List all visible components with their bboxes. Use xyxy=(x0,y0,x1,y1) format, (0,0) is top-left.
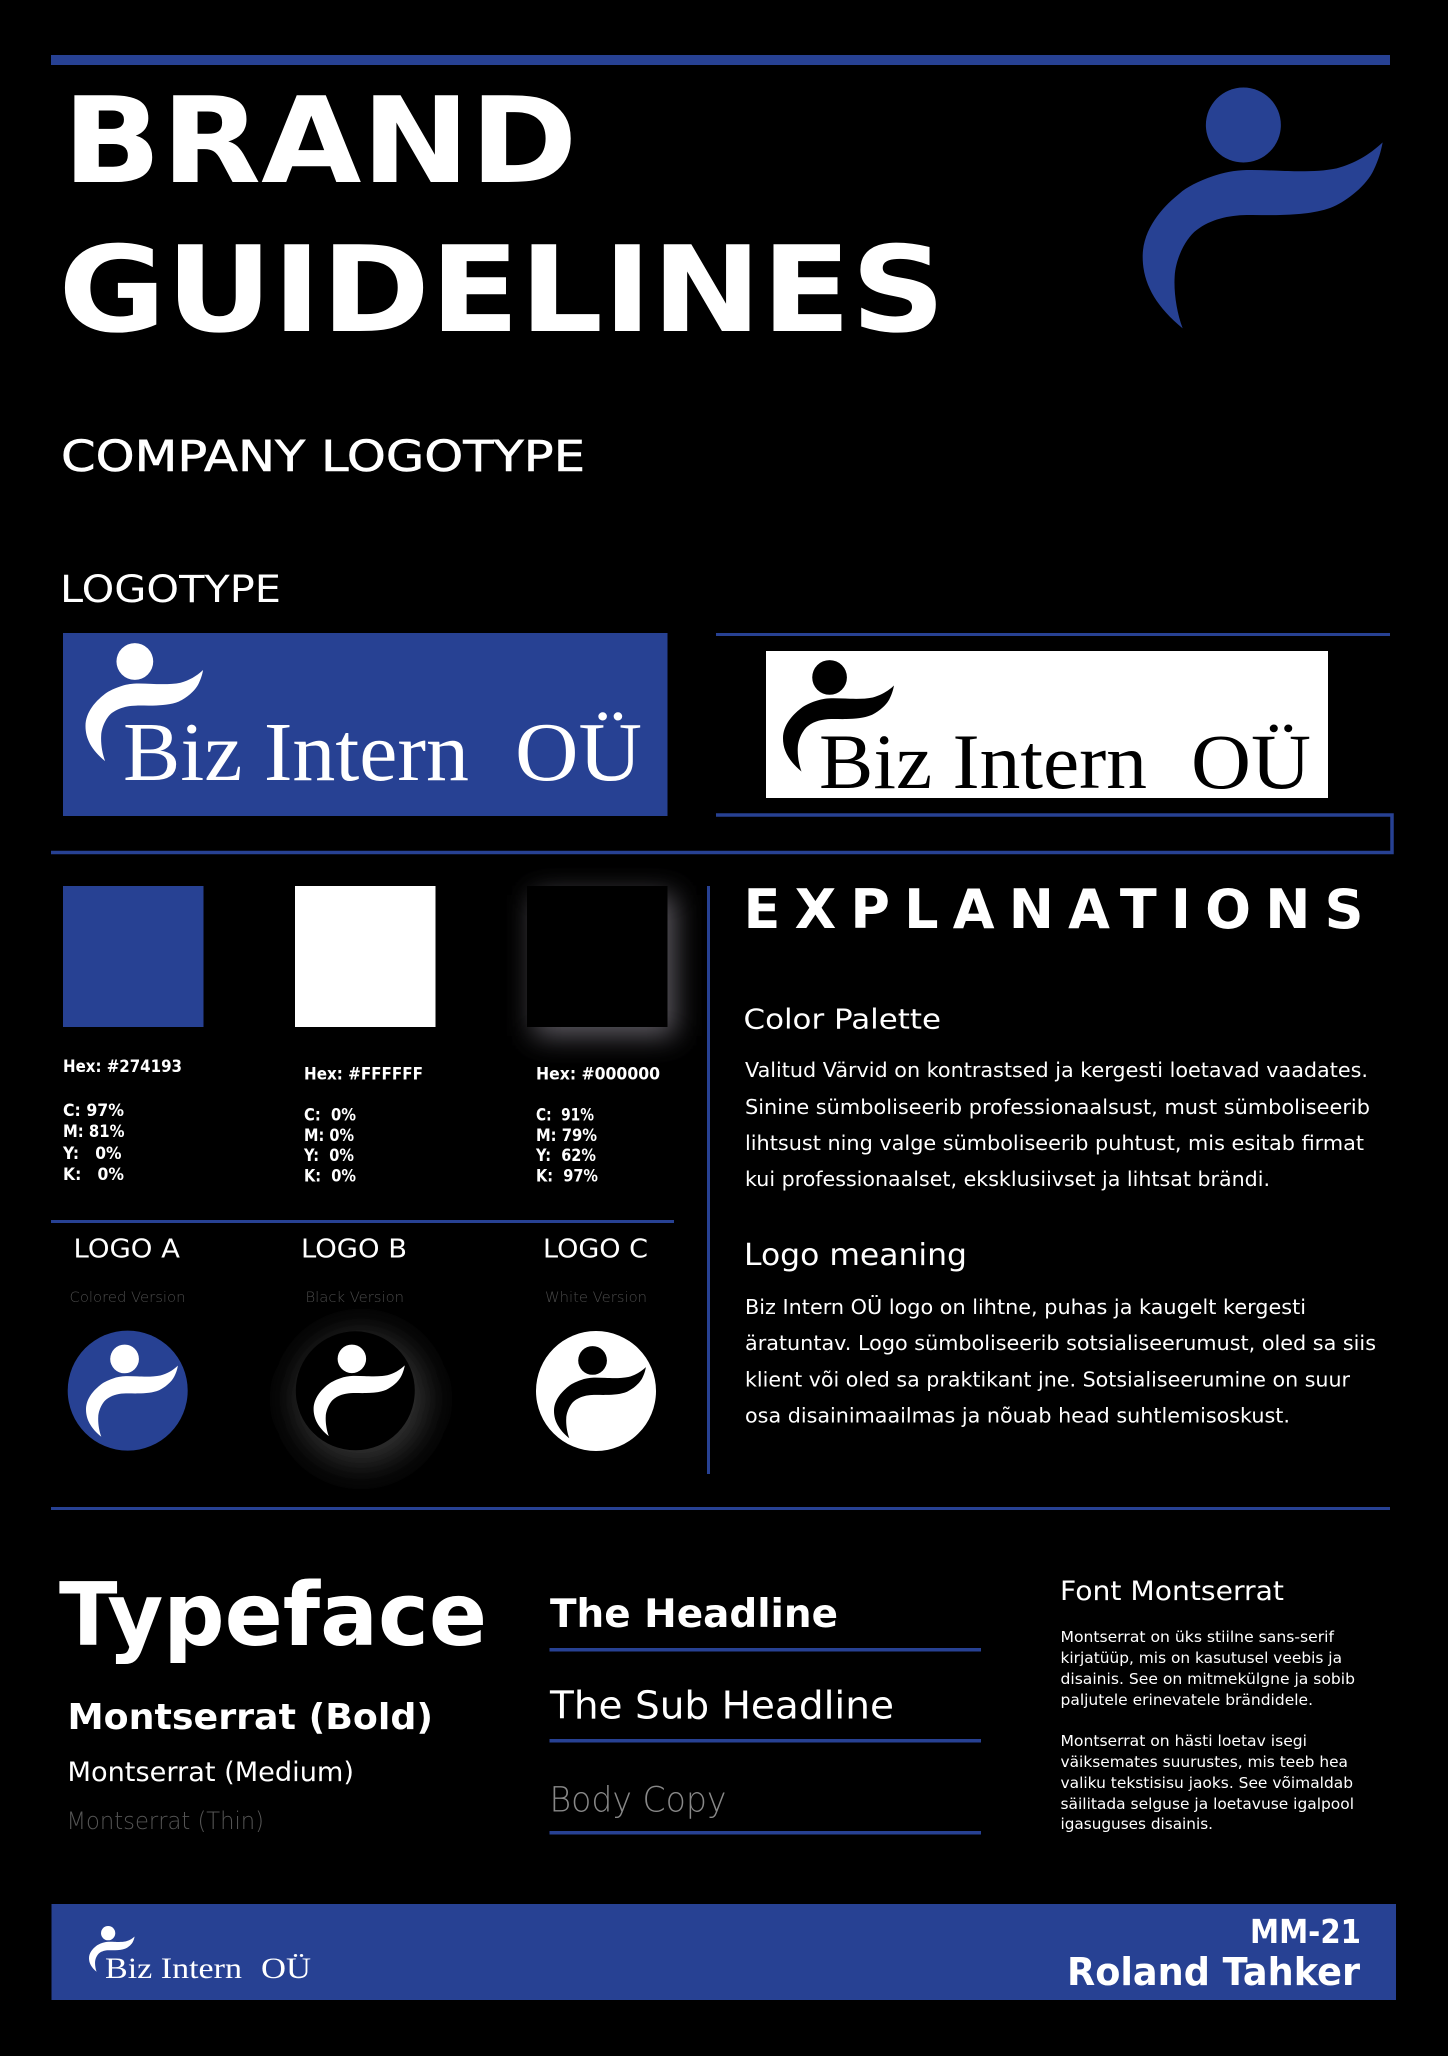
panel: white logotype xyxy=(716,633,1390,805)
panel: type hierarchy xyxy=(549,1592,981,1834)
color values: black: Hex: #000000 xyxy=(536,1065,660,1085)
panel: typeface: Montserrat (Thin) xyxy=(66,1807,264,1835)
text block: color palette: Valitud Värvid on kontrastsed ja kergesti loetavad vaadates. xyxy=(745,1058,1368,1082)
panel: typeface: Montserrat (Bold) xyxy=(68,1697,433,1738)
color values: blue: Hex: #274193 xyxy=(63,1057,182,1077)
text block: color palette: lihtsust ning valge sümboliseerib puhtust, mis esitab firmat xyxy=(745,1131,1364,1155)
color values: blue: Y: 0% xyxy=(62,1144,122,1164)
text block: font montserrat xyxy=(1060,1576,1355,1833)
text block: font montserrat: paljutele erinevatele brändidele. xyxy=(1060,1691,1313,1709)
text block: font montserrat: disainis. See on mitmekülgne ja sobib xyxy=(1060,1670,1355,1688)
icon: black mark xyxy=(783,660,894,771)
wordmark: Biz Intern xyxy=(819,718,1147,805)
text block: font montserrat: Montserrat on hästi loetav isegi xyxy=(1060,1732,1307,1750)
logo C xyxy=(536,1234,656,1451)
panel: color palette xyxy=(62,886,675,1187)
title: BRAND xyxy=(62,73,578,211)
panel: type hierarchy: Body Copy xyxy=(550,1780,726,1820)
logo B: Black Version xyxy=(306,1290,404,1306)
logo B xyxy=(295,1234,427,1465)
text block: font montserrat: säilitada selguse ja loetavuse igalpool xyxy=(1060,1795,1354,1813)
text block: color palette: Color Palette xyxy=(744,1003,941,1036)
color values: black: C: 91% xyxy=(536,1106,594,1126)
text block: font montserrat: kirjatüüp, mis on kasutusel veebis ja xyxy=(1060,1649,1342,1667)
color values: black: M: 79% xyxy=(536,1126,597,1146)
heading: company logotype: COMPANY LOGOTYPE xyxy=(61,432,585,482)
color values: black xyxy=(535,1065,660,1187)
logo A xyxy=(68,1234,188,1451)
text block: logo meaning: äratuntav. Logo sümboliseerib sotsialiseerumust, oled sa siis xyxy=(745,1331,1376,1355)
footer credit: MM-21 xyxy=(1250,1912,1361,1951)
color values: white: C: 0% xyxy=(304,1106,356,1126)
color values: white: Y: 0% xyxy=(303,1146,354,1166)
heading: logotype: LOGOTYPE xyxy=(60,568,281,611)
logo C: LOGO C xyxy=(543,1234,648,1264)
text block: color palette xyxy=(744,1003,1370,1191)
icon: footer mark xyxy=(89,1926,135,1972)
swatch: black with glow xyxy=(527,886,674,1036)
color values: blue: M: 81% xyxy=(63,1122,124,1142)
color values: blue: C: 97% xyxy=(63,1101,124,1121)
panel: type hierarchy: The Headline xyxy=(550,1592,838,1637)
text block: logo meaning: osa disainimaailmas ja nõuab head suhtlemisoskust. xyxy=(745,1404,1290,1428)
logo A: LOGO A xyxy=(74,1234,181,1264)
footer xyxy=(52,1904,1396,2000)
top bar xyxy=(51,55,1390,65)
color values: black: K: 97% xyxy=(536,1167,598,1187)
footer wordmark: OÜ xyxy=(261,1952,311,1985)
wordmark: OÜ xyxy=(1191,718,1311,805)
color values: white xyxy=(303,1065,423,1187)
text block: color palette: kui professionaalset, eksklusiivset ja lihtsat brändi. xyxy=(745,1167,1270,1191)
title xyxy=(58,73,945,360)
panel: typeface: Typeface xyxy=(59,1564,487,1666)
text block: logo meaning: klient või oled sa praktikant jne. Sotsialiseerumine on suur xyxy=(745,1368,1351,1392)
text block: font montserrat: Font Montserrat xyxy=(1060,1576,1284,1607)
text block: font montserrat: Montserrat on üks stiilne sans-serif xyxy=(1060,1628,1335,1646)
logo A: Colored Version xyxy=(70,1290,186,1306)
panel: blue logotype xyxy=(63,633,668,816)
swatch: white xyxy=(295,886,436,1027)
wordmark: OÜ xyxy=(515,706,642,799)
icon: brand mark top right xyxy=(1143,88,1383,328)
heading: explanations: EXPLANATIONS xyxy=(744,878,1364,941)
logo B: LOGO B xyxy=(301,1234,407,1264)
footer credit xyxy=(1067,1912,1361,1994)
footer credit: Roland Tahker xyxy=(1067,1950,1360,1994)
text block: logo meaning xyxy=(744,1238,1376,1428)
icon: white mark xyxy=(86,643,203,761)
text block: font montserrat: valiku tekstisisu jaoks. See võimaldab xyxy=(1060,1774,1353,1792)
color values: blue xyxy=(62,1057,182,1185)
panel: logo versions xyxy=(68,1234,656,1465)
section divider bracket xyxy=(51,815,1392,852)
text block: color palette: Sinine sümboliseerib professionaalsust, must sümboliseerib xyxy=(745,1095,1370,1119)
color values: black: Y: 62% xyxy=(535,1146,596,1166)
panel: typeface: Montserrat (Medium) xyxy=(68,1757,354,1788)
color values: blue: K: 0% xyxy=(63,1165,124,1185)
title: GUIDELINES xyxy=(58,222,945,360)
logo C: White Version xyxy=(545,1290,647,1306)
color values: white: K: 0% xyxy=(304,1167,356,1187)
text block: font montserrat: väiksemates suurustes, mis teeb hea xyxy=(1060,1753,1348,1771)
color values: white: M: 0% xyxy=(304,1126,354,1146)
panel: type hierarchy: The Sub Headline xyxy=(549,1684,894,1728)
panel: typeface xyxy=(59,1564,487,1835)
text block: logo meaning: Logo meaning xyxy=(744,1238,967,1273)
text block: font montserrat: igasuguses disainis. xyxy=(1060,1815,1213,1833)
text block: logo meaning: Biz Intern OÜ logo on lihtne, puhas ja kaugelt kergesti xyxy=(745,1295,1306,1319)
wordmark: Biz Intern xyxy=(123,706,469,799)
footer wordmark: Biz Intern xyxy=(105,1952,242,1985)
color values: white: Hex: #FFFFFF xyxy=(304,1065,423,1085)
swatch: blue xyxy=(63,886,204,1027)
